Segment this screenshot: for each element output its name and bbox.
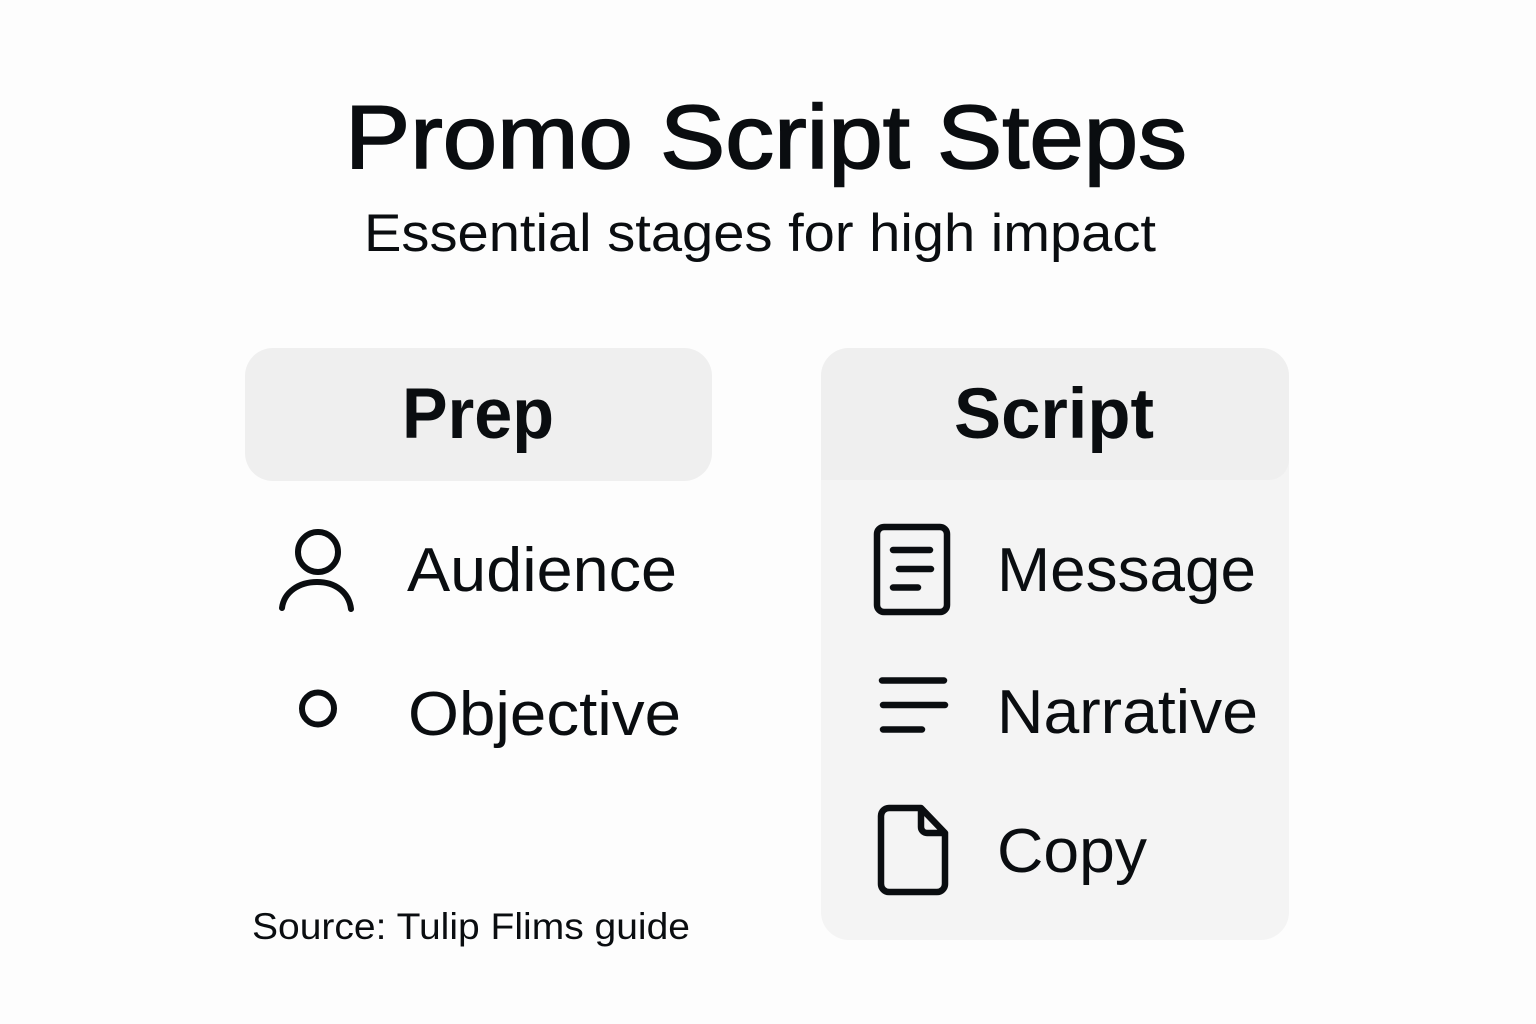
prep heading: Prep [402,375,554,454]
icon: text lines [882,680,945,730]
label: message: Message [997,536,1256,605]
prep header background [245,348,712,481]
icon: person [282,532,351,609]
subtitle: Essential stages for high impact [364,204,1156,263]
source note: Source: Tulip Flims guide [252,906,690,947]
icon: document [877,527,947,612]
panel: prep [245,348,712,749]
title: Promo Script Steps [345,88,1187,188]
script header background [821,348,1289,480]
label: narrative: Narrative [997,678,1258,747]
script heading: Script [954,375,1154,454]
icon: file [881,808,945,892]
label: copy: Copy [997,817,1147,886]
icon: circle target [302,692,334,724]
label: objective: Objective [408,680,681,749]
panel: script [821,348,1289,940]
label: audience: Audience [407,536,677,605]
script panel background [821,348,1289,940]
